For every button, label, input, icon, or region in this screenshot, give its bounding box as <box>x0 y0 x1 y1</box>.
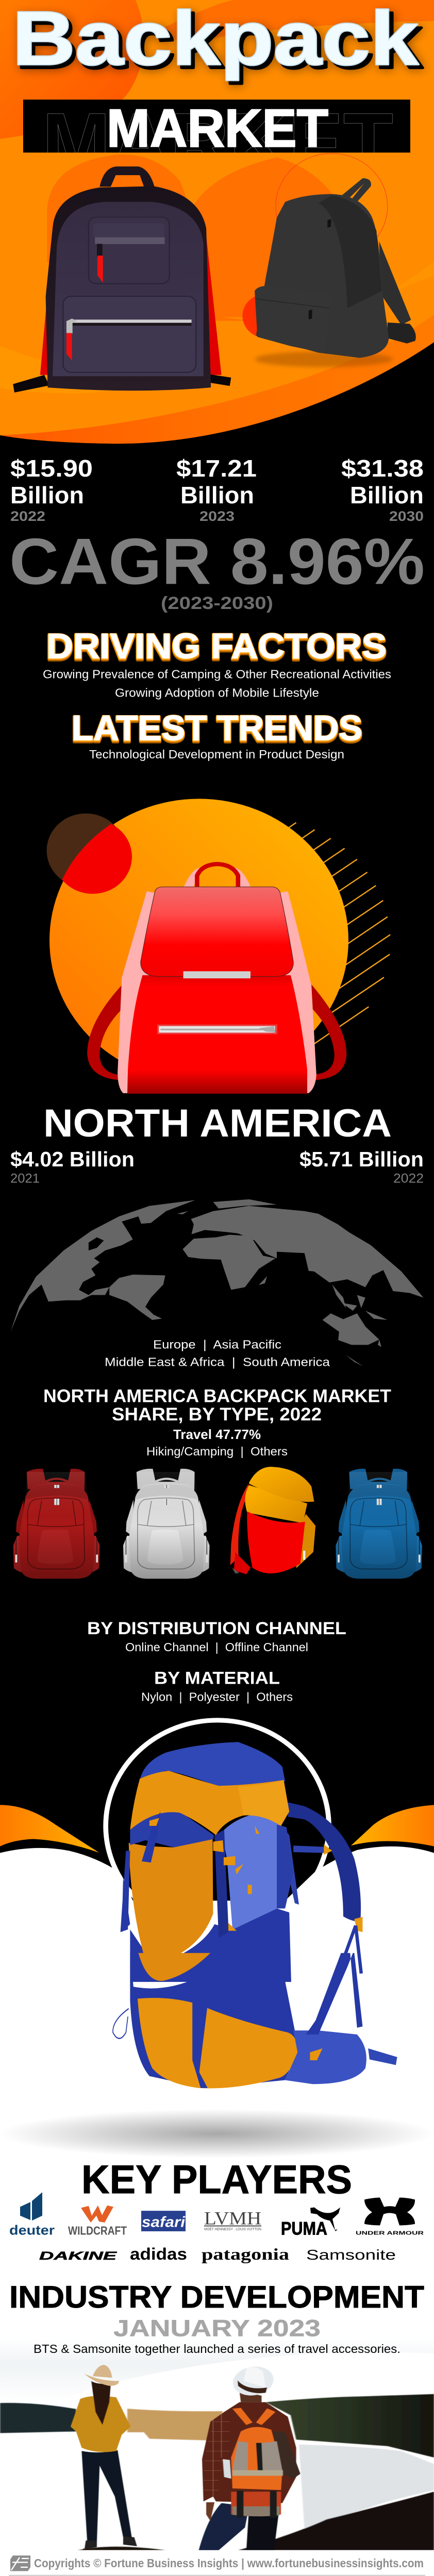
illustration: hiking backpack lower <box>113 1953 397 2088</box>
stat: North America 2022: 2022 <box>393 1172 424 1185</box>
heading: latest trends: LATEST TRENDS <box>72 708 362 748</box>
heading: key players: KEY PLAYERS <box>81 2157 352 2202</box>
banner: MARKET <box>23 99 410 152</box>
logo: Patagonia: patagonia <box>202 2245 290 2264</box>
heading: share by type <box>43 1386 391 1425</box>
backpack flap <box>141 887 293 976</box>
heading: industry development: INDUSTRY DEVELOPMENT <box>9 2280 424 2314</box>
stat: North America 2022 <box>299 1147 424 1185</box>
floor shadow <box>0 2109 434 2158</box>
logo: Wildcraft <box>68 2206 127 2237</box>
decorative stage: ring, wings and white ground <box>0 1720 434 1982</box>
banner: MARKET: MARKET <box>42 96 393 191</box>
stat: 2030 market size: Billion <box>350 482 424 509</box>
backpack side panels <box>118 891 316 1093</box>
text: other regions <box>105 1338 330 1368</box>
heading: by distribution channel: BY DISTRIBUTION CHANNEL <box>87 1619 346 1638</box>
illustration: yellow and red backpack <box>230 1467 315 1574</box>
heading: driving factors: DRIVING FACTORS <box>46 629 387 668</box>
heading: January 2023: JANUARY 2023 <box>113 2315 321 2341</box>
stat: 2022 market size <box>10 455 93 524</box>
heading: by material: BY MATERIAL <box>154 1668 280 1688</box>
stat: CAGR: (2023-2030) <box>161 594 273 613</box>
small overlapping circle <box>46 814 125 888</box>
hero background <box>0 0 434 472</box>
stat: CAGR: CAGR 8.96% <box>9 525 425 598</box>
stat: 2022 market size: 2022 <box>10 509 45 524</box>
stat: North America 2022: $5.71 Billion <box>299 1147 424 1171</box>
text: driving factors list: Growing Prevalence of Camping & Other Recreational Activities <box>43 668 391 681</box>
text: other regions: Europe | Asia Pacific <box>153 1338 281 1351</box>
heading: driving factors: DRIVING FACTORS <box>46 626 387 666</box>
stat: 2022 market size: Billion <box>10 482 84 509</box>
black curve cutting the hero <box>0 342 434 472</box>
stat: 2030 market size: 2030 <box>389 509 424 524</box>
logo: Adidas: adidas <box>130 2245 187 2264</box>
stat: 2030 market size: $31.38 <box>341 455 424 482</box>
heading: by material: Nylon | Polyester | Others <box>141 1690 293 1704</box>
illustration: hiking backpack upper <box>121 1742 362 1982</box>
text: driving factors list <box>43 668 391 699</box>
text: type segments <box>146 1427 288 1458</box>
heading: latest trends: LATEST TRENDS <box>72 709 362 748</box>
text: development description: BTS & Samsonite together launched a series of travel accessories. <box>34 2342 400 2355</box>
heading: share by type: SHARE, BY TYPE, 2022 <box>112 1404 322 1425</box>
photo: hikers by a lake <box>0 2338 434 2550</box>
logo: Under Armour: UNDER ARMOUR <box>356 2230 424 2236</box>
text: type segments: Travel 47.77% <box>173 1427 261 1442</box>
footer band <box>0 2550 434 2575</box>
text: other regions: Middle East & Africa | South America <box>105 1355 330 1368</box>
chart: curved world map <box>10 1199 424 1366</box>
title: Backpack: Backpack <box>15 0 423 85</box>
stat: 2023 market size: 2023 <box>199 509 235 524</box>
logo: Puma: PUMA <box>281 2218 327 2239</box>
title: Backpack: Backpack <box>15 0 423 84</box>
heading: by distribution channel <box>87 1619 346 1654</box>
stat: 2030 market size <box>341 455 424 524</box>
banner: MARKET: MARKET <box>107 98 328 158</box>
text: type segments: Hiking/Camping | Others <box>146 1445 288 1458</box>
backpack top handle <box>184 868 251 887</box>
illustration: white backpack <box>123 1469 210 1579</box>
logo: LVMH: MOËT HENNESSY . LOUIS VUITTON <box>204 2227 261 2231</box>
heading: by distribution channel: Online Channel | Offline Channel <box>125 1641 308 1654</box>
illustration: grey side-view backpack <box>242 154 416 367</box>
backpack body <box>127 975 307 1094</box>
front zipper <box>157 1025 277 1034</box>
logo: Dakine: DAKINE <box>39 2249 118 2262</box>
logo: Wildcraft: WILDCRAFT <box>68 2224 127 2237</box>
heading: by material <box>141 1668 293 1704</box>
illustration: sun circle with hatching and red backpack <box>46 799 390 1094</box>
heading: North America: NORTH AMERICA <box>43 1101 392 1145</box>
logo: deuter <box>9 2192 55 2238</box>
stat: North America 2021 <box>10 1147 135 1185</box>
heading: driving factors: DRIVING FACTORS <box>46 627 387 666</box>
illustration: red backpack <box>13 1469 99 1579</box>
stat: 2023 market size: $17.21 <box>176 455 257 482</box>
logo: Puma <box>281 2207 340 2239</box>
backpack shoulder straps <box>87 984 346 1080</box>
stat: North America 2021: 2021 <box>10 1172 40 1185</box>
logo: LVMH: LVMH <box>204 2209 261 2229</box>
stat: 2022 market size: $15.90 <box>10 455 93 482</box>
illustration: dark front-facing backpack <box>13 166 231 393</box>
stat: 2023 market size <box>176 455 257 524</box>
text: driving factors list: Growing Adoption of Mobile Lifestyle <box>115 686 319 699</box>
icon: Fortune Business Insights logo <box>10 2555 30 2571</box>
hatching lines <box>265 823 390 1063</box>
logo: deuter: deuter <box>9 2223 55 2238</box>
metal buckle <box>183 971 251 978</box>
illustration: blue backpack <box>336 1469 422 1579</box>
heading: latest trends: LATEST TRENDS <box>72 710 362 750</box>
stat: North America 2021: $4.02 Billion <box>10 1147 135 1171</box>
stat: 2023 market size: Billion <box>180 482 254 509</box>
heading: share by type: NORTH AMERICA BACKPACK MARKET <box>43 1386 391 1406</box>
text: latest trend: Technological Development in Product Design <box>89 748 344 761</box>
logo: Under Armour <box>356 2198 424 2236</box>
logo: safari: safari <box>142 2214 186 2230</box>
logo: Samsonite: Samsonite <box>306 2247 396 2263</box>
